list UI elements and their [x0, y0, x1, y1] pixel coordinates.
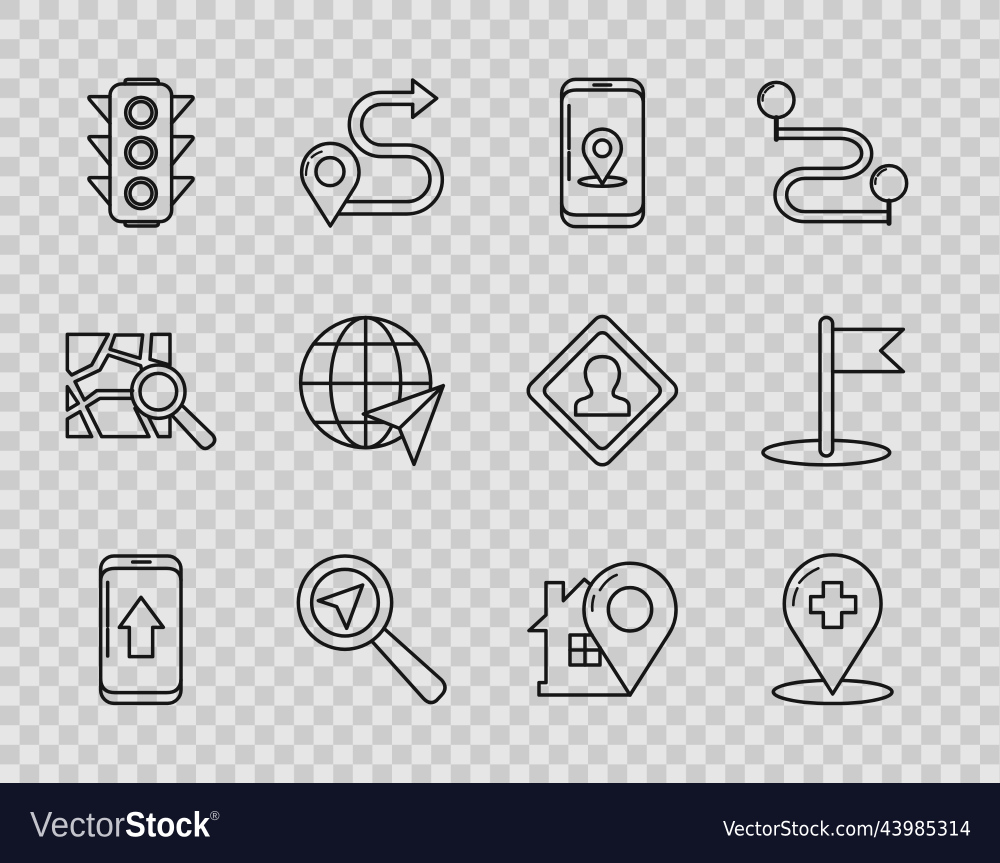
icon: city map with magnifying glass: [67, 334, 215, 448]
icon: diamond road sign with person: [524, 312, 681, 469]
icon: route with location pin and arrow: [302, 80, 442, 226]
image id text: VectorStock.com/43985314: [723, 818, 971, 840]
icon: winding road between two pins: [759, 82, 907, 223]
icon: magnifying glass with navigation arrow: [298, 556, 445, 703]
icon: smartphone with location pin: [562, 79, 643, 227]
icon: globe with paper plane: [301, 318, 443, 464]
icon: smartphone with up arrow: [101, 556, 181, 703]
icon: traffic light: [89, 79, 193, 226]
icon: hospital location pin: [773, 555, 892, 704]
brand logo text: Vector: [30, 806, 125, 844]
brand logo text: Stock: [125, 806, 210, 844]
icon: flag on pole: [763, 317, 903, 465]
brand logo text: [30, 806, 220, 844]
icon: house with location pin: [529, 563, 676, 695]
footer bar: [0, 783, 1000, 863]
brand logo text: ®: [210, 808, 220, 823]
